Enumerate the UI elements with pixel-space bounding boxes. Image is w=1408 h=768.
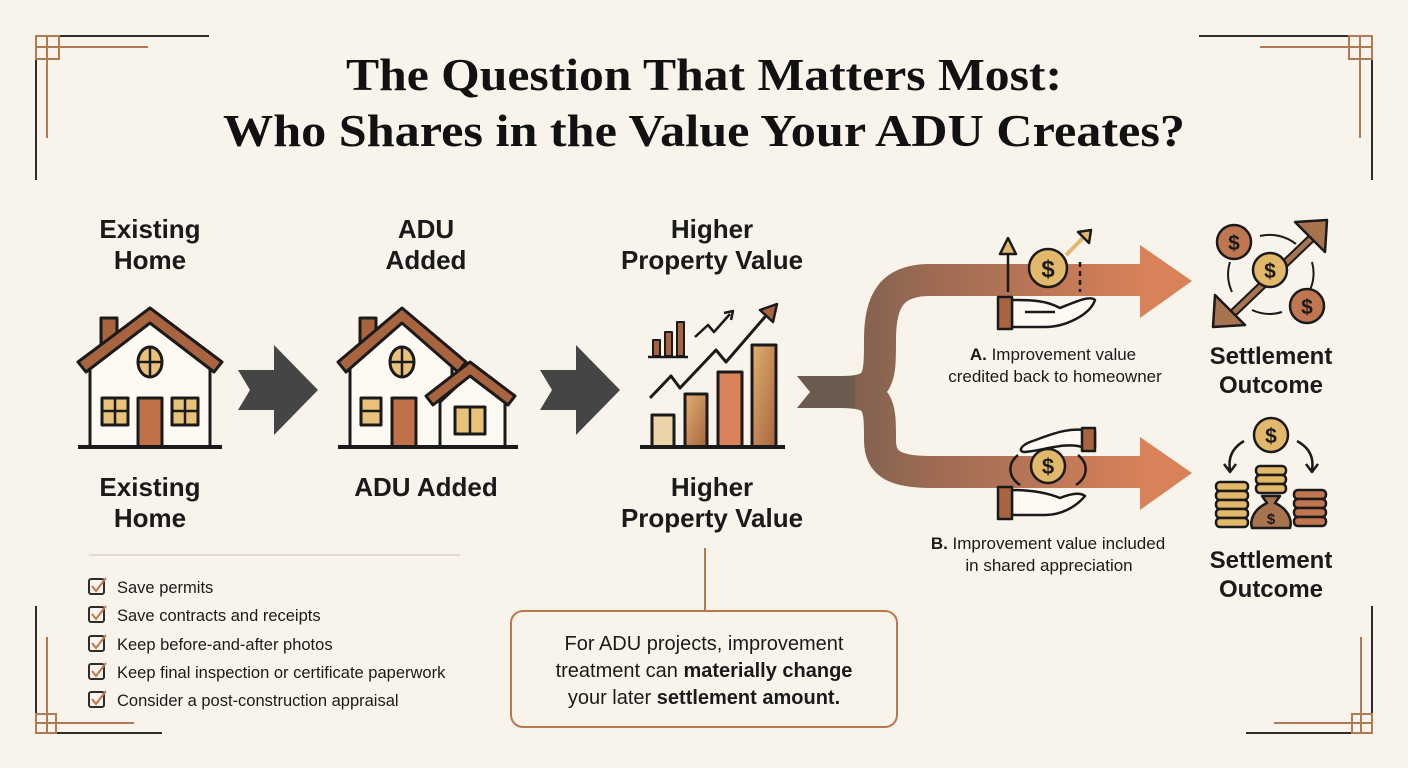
icon: settlement outcome B (coin stacks and bag) xyxy=(1216,418,1326,528)
divider xyxy=(89,554,460,556)
label: Settlement Outcome B xyxy=(1210,547,1332,603)
icon: house with ADU xyxy=(338,308,518,447)
step label: ADU Added (top) xyxy=(386,214,466,275)
callout: treatment can materially change xyxy=(556,660,852,682)
callout xyxy=(511,611,897,727)
text: option A xyxy=(948,345,1162,386)
step label: Existing Home (bottom) xyxy=(99,472,201,533)
checklist: Save contracts and receipts xyxy=(117,607,321,625)
text: option A: A. Improvement value xyxy=(970,345,1136,364)
text: option A: credited back to homeowner xyxy=(948,367,1162,386)
title: Who Shares in the Value Your ADU Creates? xyxy=(223,105,1185,156)
icon: rising bar chart xyxy=(640,304,785,447)
step label: Existing Home (bottom): Home xyxy=(114,503,186,533)
corner decoration: top-left xyxy=(36,36,209,180)
icon: settlement outcome A (exchange coins): $ xyxy=(1228,232,1240,255)
title: The Question That Matters Most: xyxy=(346,49,1062,100)
corner decoration: bottom-left xyxy=(36,606,162,733)
arrow: step 1 to 2 xyxy=(238,345,318,435)
text: option B xyxy=(931,534,1165,575)
icon: settlement outcome A (exchange coins): $ xyxy=(1264,260,1276,283)
icon: hand with coin and up arrows (option A): $ xyxy=(1041,256,1055,283)
title xyxy=(223,49,1185,156)
checklist: Keep final inspection or certificate paperwork xyxy=(117,664,446,682)
text: option B: in shared appreciation xyxy=(965,556,1133,575)
corner decoration: bottom-right xyxy=(1246,606,1372,733)
icon: settlement outcome A (exchange coins): $ xyxy=(1301,296,1313,319)
checklist: Consider a post-construction appraisal xyxy=(117,692,399,710)
callout: your later settlement amount. xyxy=(568,687,840,709)
step label: Existing Home (top): Existing xyxy=(99,214,201,244)
icon: hands around coin (option B): $ xyxy=(1042,454,1054,479)
checklist xyxy=(89,578,446,710)
step label: ADU Added (top): ADU xyxy=(398,214,454,244)
icon: hands around coin (option B) xyxy=(998,428,1095,519)
label: Settlement Outcome B: Outcome xyxy=(1219,576,1323,603)
step label: Higher Property Value (top): Property Value xyxy=(621,245,803,275)
checklist: Save permits xyxy=(117,579,213,597)
corner decoration: top-right xyxy=(1199,36,1372,180)
label: Settlement Outcome B: Settlement xyxy=(1210,547,1332,574)
connector line to callout xyxy=(704,548,706,611)
icon: existing home xyxy=(78,308,222,447)
step label: Existing Home (top) xyxy=(99,214,201,275)
step label: Existing Home (top): Home xyxy=(114,245,186,275)
arrow: step 2 to 3 xyxy=(540,345,620,435)
checklist: Keep before-and-after photos xyxy=(117,636,333,654)
step label: Higher Property Value (top) xyxy=(621,214,803,275)
step label: ADU Added (bottom): ADU Added xyxy=(354,472,498,502)
icon: settlement outcome B (coin stacks and bag): $ xyxy=(1265,425,1277,448)
label: Settlement Outcome A xyxy=(1210,343,1332,399)
text: option B: B. Improvement value included xyxy=(931,534,1165,553)
label: Settlement Outcome A: Outcome xyxy=(1219,372,1323,399)
icon: settlement outcome B (coin stacks and bag): $ xyxy=(1267,511,1276,528)
step label: Higher Property Value (top): Higher xyxy=(671,214,753,244)
callout: For ADU projects, improvement xyxy=(565,633,844,655)
icon: hand with coin and up arrows (option A) xyxy=(998,230,1095,329)
step label: Higher Property Value (bottom) xyxy=(621,472,803,533)
step label: Higher Property Value (bottom): Property Value xyxy=(621,503,803,533)
step label: Existing Home (bottom): Existing xyxy=(99,472,201,502)
branching arrows xyxy=(797,245,1192,510)
label: Settlement Outcome A: Settlement xyxy=(1210,343,1332,370)
step label: Higher Property Value (bottom): Higher xyxy=(671,472,753,502)
icon: settlement outcome A (exchange coins) xyxy=(1213,220,1327,327)
step label: ADU Added (top): Added xyxy=(386,245,466,275)
